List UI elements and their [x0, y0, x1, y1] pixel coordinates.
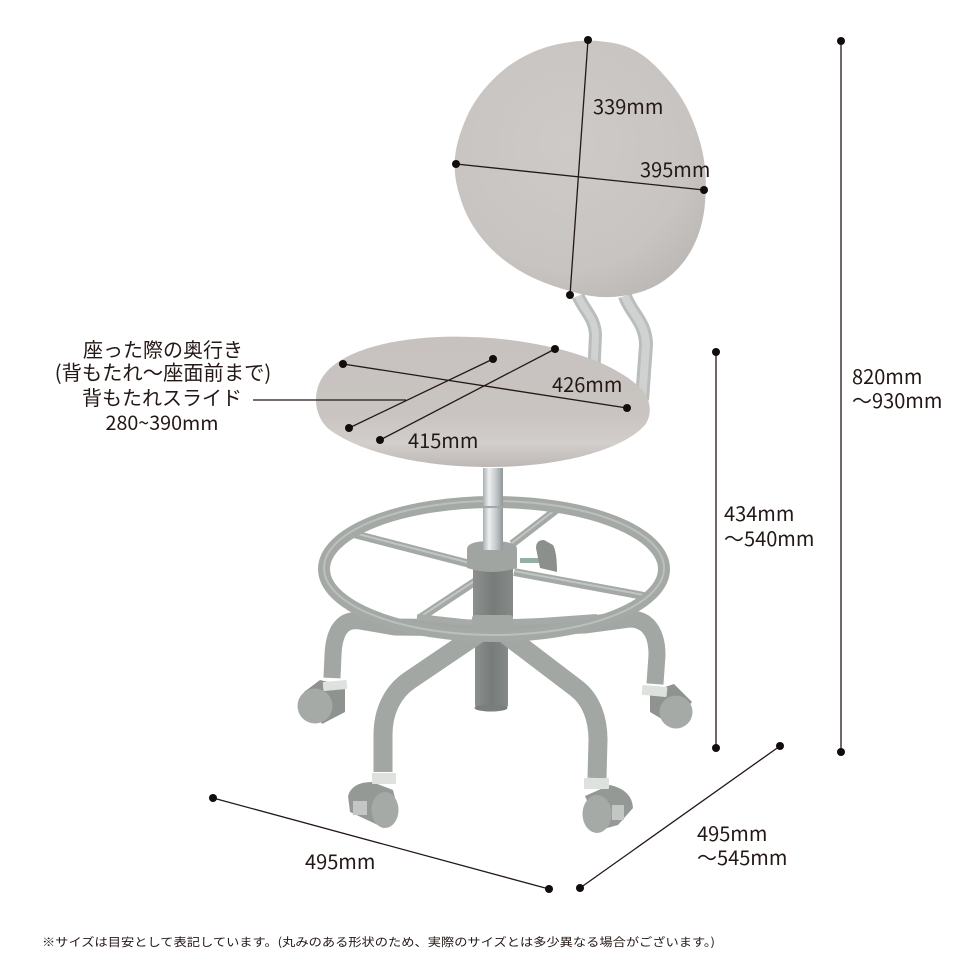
seat depth line: [376, 345, 559, 444]
label: base depth: [697, 818, 787, 871]
seat slide depth line: [345, 355, 497, 432]
seat height line: [712, 348, 720, 752]
label: seat depth with slide: 座った際の奥行き: [83, 334, 243, 363]
column lip: [472, 615, 513, 632]
base legs: [332, 619, 657, 778]
label: seat depth with slide: [55, 334, 271, 436]
back support tubes: [578, 296, 646, 400]
leader line: [253, 399, 406, 401]
foot ring spokes: [350, 506, 644, 618]
backrest height line: [566, 36, 592, 299]
label: base depth: 〜545mm: [697, 842, 787, 871]
label: seat height: [724, 498, 814, 552]
seat: [316, 337, 650, 467]
gas lift post: [483, 468, 503, 544]
backrest: [455, 40, 706, 297]
label: seat depth: 415mm: [408, 425, 478, 454]
foot ring: [324, 501, 664, 636]
base width line: [209, 794, 553, 893]
ring inner bar: [417, 617, 597, 623]
label: overall height: 820mm: [852, 361, 922, 390]
footnote: ※サイズは目安として表記しています。(丸みのある形状のため、実際のサイズとは多少異なる場合がございます。): [42, 934, 715, 950]
lower post: [475, 636, 508, 708]
dimension lines: [209, 36, 845, 893]
centre column: [473, 558, 513, 620]
caster front left: [348, 773, 398, 828]
backrest width line: [452, 160, 708, 194]
overall height line: [837, 37, 845, 756]
label: base width: 495mm: [305, 846, 375, 875]
label: base depth: 495mm: [697, 818, 767, 847]
base depth line: [576, 742, 784, 892]
chair photo: [298, 40, 706, 833]
label: seat width: 426mm: [552, 369, 622, 398]
label: seat depth with slide: 背もたれスライド: [82, 382, 242, 411]
caster rear right: [642, 684, 692, 728]
caster front right: [582, 778, 633, 833]
label: backrest height: 339mm: [593, 91, 663, 120]
label: seat depth with slide: (背もたれ〜座面前まで): [55, 356, 271, 386]
label: overall height: [852, 361, 942, 414]
label: seat depth with slide: 280~390mm: [106, 407, 218, 436]
column collar: [467, 541, 517, 572]
label: backrest width: 395mm: [640, 154, 710, 183]
label: seat height: 434mm: [724, 498, 794, 527]
adjustment knob: [520, 540, 557, 572]
seat width line: [339, 360, 631, 412]
caster rear left: [298, 680, 347, 724]
label: seat height: 〜540mm: [724, 523, 814, 552]
label: overall height: 〜930mm: [852, 385, 942, 414]
